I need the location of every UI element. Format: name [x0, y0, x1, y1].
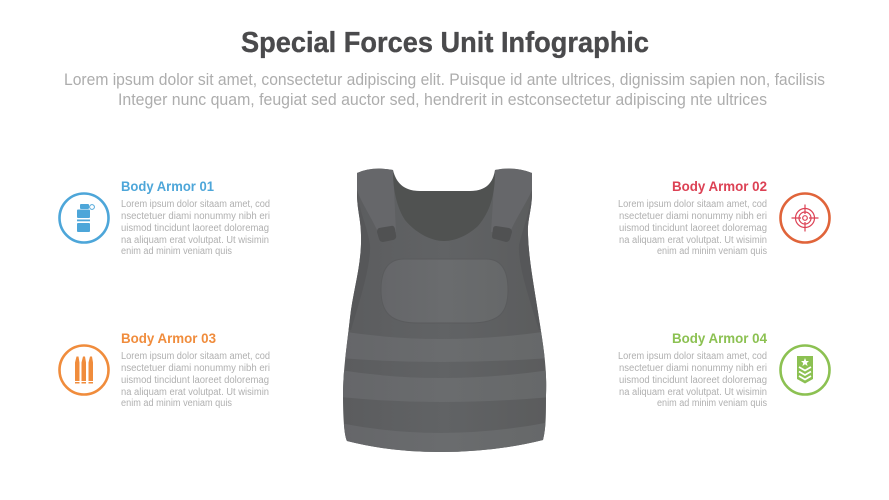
text block 03 — [121, 351, 270, 409]
text block 03: Lorem ipsum dolor sitaam amet, cod — [121, 351, 270, 362]
text block 04: nsectetuer diami nonummy nibh eri — [619, 363, 767, 374]
icon: grenade — [60, 194, 108, 242]
icon: target — [780, 194, 830, 242]
panel: body armor 03 — [60, 331, 270, 409]
text block 04: na aliquam erat volutpat. Ut wisimin — [619, 387, 767, 398]
vest buckle right — [492, 226, 512, 242]
subtitle: Integer nunc quam, feugiat sed auctor sed, hendrerit in estconsectetur adipiscing nte ultrices — [118, 91, 767, 109]
text block 03: uismod tincidunt laoreet doloremag — [121, 375, 269, 386]
vest lower bands — [340, 331, 550, 362]
text block 02: nsectetuer diami nonummy nibh eri — [619, 211, 767, 222]
text block 02: na aliquam erat volutpat. Ut wisimin — [619, 235, 767, 246]
text block 02: enim ad minim veniam quis — [657, 246, 767, 257]
panel: body armor 02 — [618, 179, 830, 257]
text block 03: nsectetuer diami nonummy nibh eri — [121, 363, 270, 374]
panel: body armor 04 — [618, 331, 830, 409]
text block 01: na aliquam erat volutpat. Ut wisimin — [121, 235, 269, 246]
text block 01: uismod tincidunt laoreet doloremag — [121, 223, 269, 234]
heading 03: Body Armor 03 — [121, 331, 216, 346]
text block 04: uismod tincidunt laoreet doloremag — [619, 375, 767, 386]
text block 02: Lorem ipsum dolor sitaam amet, cod — [618, 199, 767, 210]
text block 02: uismod tincidunt laoreet doloremag — [619, 223, 767, 234]
vest neck interior — [393, 172, 495, 241]
heading 04: Body Armor 04 — [672, 331, 767, 346]
heading 01: Body Armor 01 — [121, 179, 214, 194]
vest side shading — [348, 194, 541, 330]
text block 01: nsectetuer diami nonummy nibh eri — [121, 211, 270, 222]
text block 01: enim ad minim veniam quis — [121, 246, 232, 257]
title: Special Forces Unit Infographic — [241, 27, 649, 59]
text block 04: Lorem ipsum dolor sitaam amet, cod — [618, 351, 767, 362]
vest shoulder straps — [355, 168, 534, 232]
subtitle — [64, 71, 825, 109]
icon: bullets — [60, 346, 108, 394]
vest buckle left — [377, 226, 396, 242]
text block 03: na aliquam erat volutpat. Ut wisimin — [121, 387, 269, 398]
illustration: tactical vest — [343, 168, 546, 452]
vest chest panel — [381, 259, 508, 323]
text block 01 — [121, 199, 270, 257]
subtitle: Lorem ipsum dolor sit amet, consectetur adipiscing elit. Puisque id ante ultrices, dignissim sapien non, facilisis — [64, 71, 825, 89]
text block 04: enim ad minim veniam quis — [657, 398, 767, 409]
panel: body armor 01 — [60, 179, 270, 257]
heading 02: Body Armor 02 — [672, 179, 767, 194]
icon: rank badge — [780, 346, 830, 394]
text block 02 — [618, 199, 767, 257]
text block 03: enim ad minim veniam quis — [121, 398, 232, 409]
text block 04 — [618, 351, 767, 409]
text block 01: Lorem ipsum dolor sitaam amet, cod — [121, 199, 270, 210]
